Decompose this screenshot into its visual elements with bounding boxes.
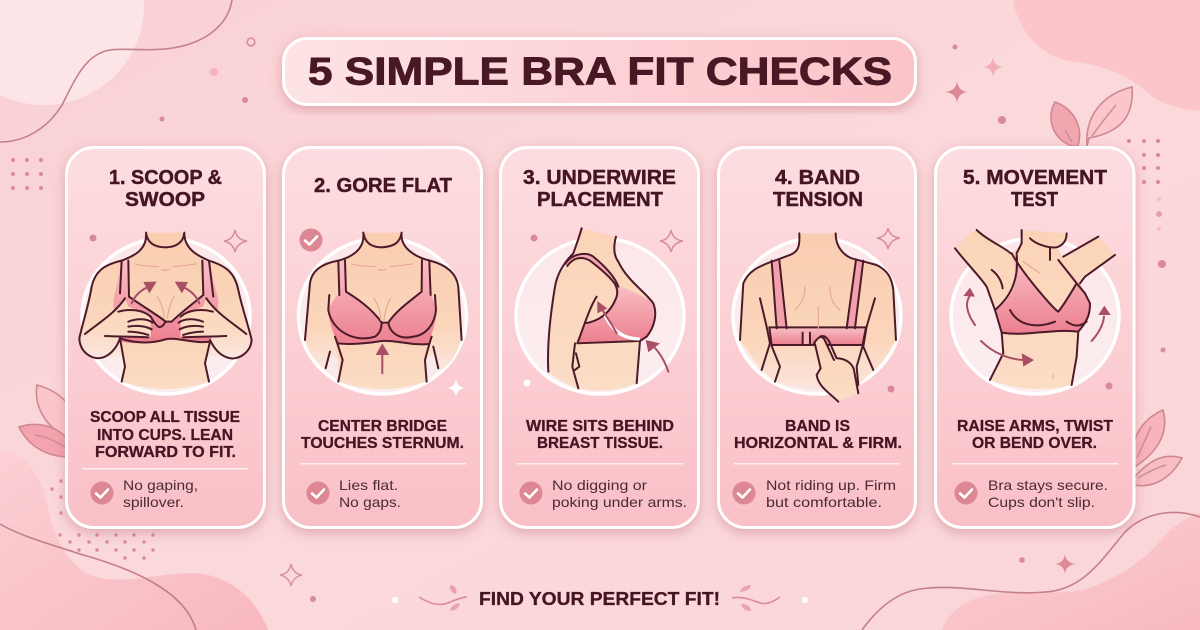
- background blob: top left: [0, 0, 144, 105]
- instruction text: BREAST TISSUE.: [537, 435, 663, 452]
- icon: check: [306, 482, 330, 504]
- decorative curve: bottom left: [0, 524, 196, 630]
- result text: Lies flat.: [339, 477, 398, 493]
- illustration: back view band: [740, 233, 896, 402]
- illustration: hands scooping: [79, 233, 252, 389]
- instruction text: HORIZONTAL & FIRM.: [734, 435, 902, 452]
- result text: spillover.: [123, 494, 184, 510]
- heading: 3. UNDERWIRE: [523, 167, 676, 189]
- heading: 1. SCOOP &: [109, 167, 222, 189]
- footer text: FIND YOUR PERFECT FIT!: [479, 589, 720, 609]
- instruction text: SCOOP ALL TISSUE: [90, 409, 240, 426]
- panel: check 5 movement test: [936, 148, 1134, 528]
- instruction text: CENTER BRIDGE: [318, 418, 447, 435]
- result text: Bra stays secure.: [988, 477, 1108, 493]
- footer flourish: left: [419, 585, 467, 611]
- decorative curve: bottom right: [862, 512, 1200, 630]
- title banner: [284, 38, 916, 104]
- result text: Cups don't slip.: [988, 494, 1095, 510]
- result text: Not riding up. Firm: [766, 477, 896, 493]
- result text: No gaping,: [123, 477, 198, 493]
- icon: check: [90, 482, 114, 504]
- leaves: top right: [1051, 87, 1132, 146]
- panel: check 2 gore flat: [284, 148, 482, 528]
- panel: check 3 underwire placement: [500, 148, 698, 528]
- result text: No digging or: [552, 477, 647, 493]
- background blob: bottom left: [0, 451, 268, 630]
- panel: check 1 scoop and swoop: [66, 148, 264, 528]
- title: 5 SIMPLE BRA FIT CHECKS: [308, 50, 892, 94]
- instruction text: WIRE SITS BEHIND: [526, 418, 674, 435]
- result text: No gaps.: [339, 494, 401, 510]
- illustration: side view underwire: [548, 228, 668, 391]
- instruction text: RAISE ARMS, TWIST: [957, 418, 1114, 435]
- heading: 5. MOVEMENT: [963, 167, 1107, 189]
- illustration: arms raised movement: [955, 230, 1115, 389]
- illustration: front torso with flat gore: [305, 233, 462, 389]
- instruction text: FORWARD TO FIT.: [95, 444, 236, 461]
- result text: but comfortable.: [766, 494, 882, 510]
- icon: check: [520, 482, 542, 504]
- icon: check: [732, 482, 756, 504]
- leaves: right: [1130, 410, 1182, 486]
- icon: check: [954, 482, 978, 504]
- background blob: top right: [1013, 0, 1200, 111]
- icon: check badge: [300, 228, 322, 252]
- instruction text: TOUCHES STERNUM.: [301, 435, 464, 452]
- heading: PLACEMENT: [537, 189, 663, 211]
- footer flourish: right: [732, 585, 780, 611]
- instruction text: OR BEND OVER.: [972, 435, 1097, 452]
- background blob: bottom right: [942, 513, 1200, 630]
- heading: TEST: [1011, 189, 1058, 211]
- heading: 4. BAND: [775, 167, 860, 189]
- instruction text: INTO CUPS. LEAN: [97, 427, 233, 444]
- result text: poking under arms.: [552, 494, 687, 510]
- instruction text: BAND IS: [785, 418, 850, 435]
- decorative curve: top left: [0, 0, 232, 142]
- heading: 2. GORE FLAT: [314, 175, 452, 197]
- heading: SWOOP: [125, 189, 205, 211]
- heading: TENSION: [773, 189, 863, 211]
- leaves: left: [19, 385, 75, 457]
- panel: check 4 band tension: [718, 148, 916, 528]
